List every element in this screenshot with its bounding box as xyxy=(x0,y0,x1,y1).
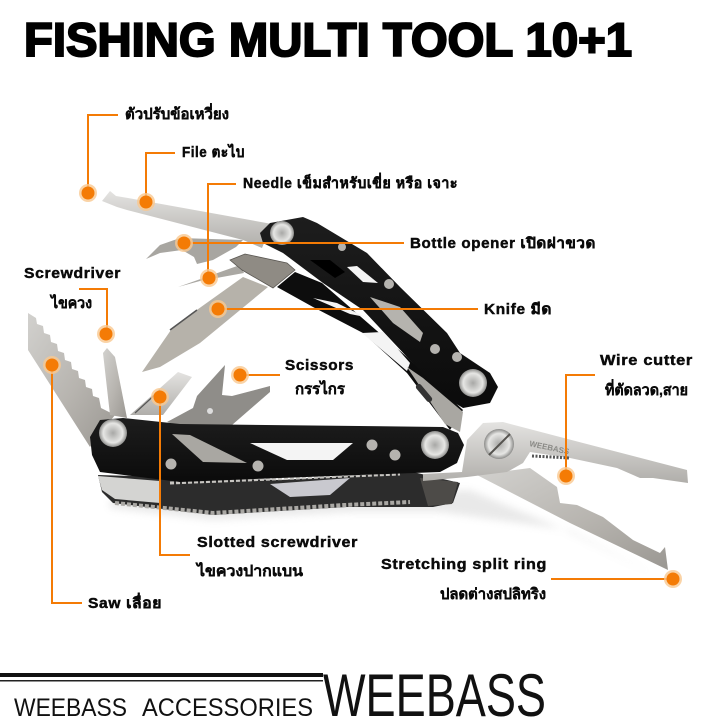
callout: swivel adjuster xyxy=(79,103,229,202)
callout: screwdriver: Screwdriver xyxy=(24,266,121,282)
callout: knife xyxy=(209,300,552,318)
callout: slotted screwdriver xyxy=(151,388,358,580)
callout: knife: Knife มีด xyxy=(484,301,552,318)
pliers lower jaw xyxy=(477,468,668,570)
scissors xyxy=(167,365,270,430)
metal liner xyxy=(407,367,463,432)
handle screws xyxy=(99,221,487,472)
file blade xyxy=(102,191,272,248)
callout: slotted screwdriver: ไขควงปากแบน xyxy=(195,561,304,580)
callout: slotted screwdriver: Slotted screwdriver xyxy=(197,535,358,551)
multi tool photo illustration xyxy=(28,191,688,575)
knife blade xyxy=(142,277,268,372)
callout: needle: Needle เข็มสำหรับเขี่ย หรือ เจาะ xyxy=(243,172,458,192)
callout: screwdriver xyxy=(24,266,121,343)
callout: bottle opener xyxy=(175,234,596,252)
soft shadow xyxy=(110,490,655,575)
callout: stretching split ring xyxy=(381,557,682,603)
callout: scissors xyxy=(231,358,354,398)
saw blade xyxy=(28,313,115,447)
callout: needle xyxy=(200,172,458,287)
slotted screwdriver xyxy=(130,372,192,415)
callout: bottle opener: Bottle opener เปิดฝาขวด xyxy=(410,235,596,252)
callout: scissors: Scissors xyxy=(285,358,354,374)
callout: file: File ตะไบ xyxy=(182,143,245,161)
callout: wire cutter: ที่ตัดลวด,สาย xyxy=(605,379,688,399)
bottle opener xyxy=(146,238,243,264)
footer tagline xyxy=(14,694,313,720)
callout: wire cutter: Wire cutter xyxy=(600,353,693,369)
callout: saw: Saw เลื่อย xyxy=(88,592,162,612)
callout: stretching split ring: Stretching split ring xyxy=(381,557,547,573)
lower black handle xyxy=(90,418,464,482)
footer brand strip xyxy=(0,662,546,720)
needle xyxy=(178,265,244,287)
screwdriver xyxy=(103,348,127,418)
lower frame with serrations xyxy=(98,472,460,515)
callout: swivel adjuster: ตัวปรับข้อเหวี่ยง xyxy=(125,103,229,123)
brand mark: WEEBASS xyxy=(529,439,571,457)
rear black handle xyxy=(277,272,463,430)
callout: file xyxy=(137,143,245,211)
callout: stretching split ring: ปลดต่างสปลิทริง xyxy=(440,585,546,603)
callout: wire cutter xyxy=(557,353,693,485)
callout: scissors: กรรไกร xyxy=(295,379,346,398)
folded tool plates xyxy=(230,254,295,288)
callout: screwdriver: ไขควง xyxy=(49,293,92,312)
pliers pivot screw xyxy=(484,429,514,459)
callout: saw xyxy=(43,356,162,612)
title: FISHING MULTI TOOL 10+1 xyxy=(24,13,632,66)
pliers upper jaw xyxy=(423,422,688,483)
upper black handle xyxy=(260,217,498,408)
